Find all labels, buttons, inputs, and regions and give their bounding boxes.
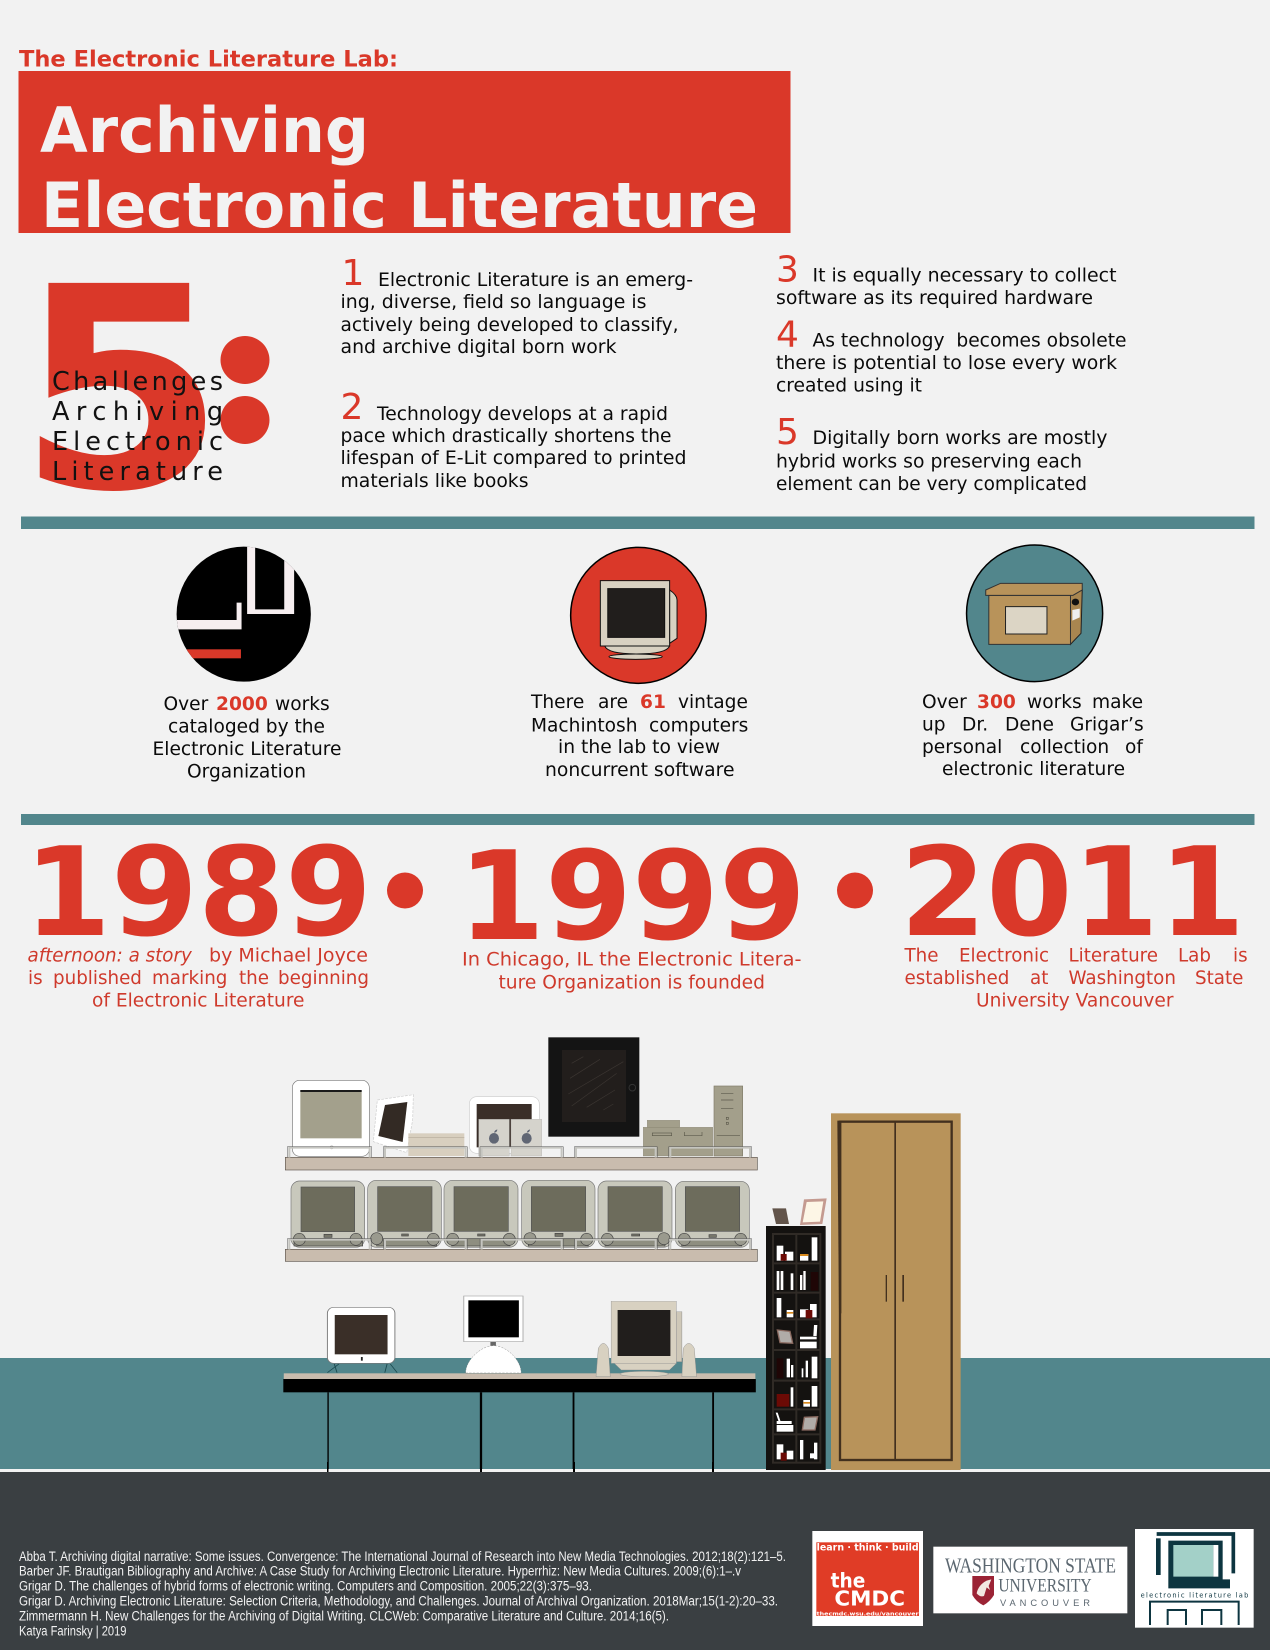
stat: 2000 works: Organization <box>187 762 306 783</box>
timeline: 2011: is <box>1233 946 1248 967</box>
stat: 61 computers <box>530 692 748 781</box>
timeline: 2011: Electronic <box>959 946 1049 967</box>
timeline: 1999: In Chicago, IL the Electronic Litera- <box>462 950 802 971</box>
challenge 1 <box>340 253 693 358</box>
logo: Electronic Literature Lab <box>1135 1529 1254 1628</box>
stat: 61 computers: There <box>530 692 584 713</box>
timeline: 2011: The <box>904 946 939 967</box>
stat: 2000 works: Electronic Literature <box>152 739 342 760</box>
stat: 300 works: Over <box>922 692 967 713</box>
challenge 2: 2 <box>340 387 363 428</box>
timeline: 1989: 1989 <box>24 822 372 965</box>
challenge 1: ing, diverse, field so language is <box>340 292 646 313</box>
stat: 61 computers: noncurrent software <box>545 760 734 781</box>
stat: 300 works: collection <box>1020 737 1109 758</box>
stat: 2000 works <box>152 694 342 783</box>
stat: 61 computers: computers <box>649 716 748 737</box>
logo: the CMDC <box>812 1531 923 1626</box>
heading: 5 challenges: Archiving <box>52 397 223 427</box>
challenge 5: hybrid works so preserving each <box>776 452 1082 473</box>
references: Zimmermann H. New Challenges for the Archiving of Digital Writing. CLCWeb: Comparative Literature and Culture. 2014;16(5). <box>19 1608 669 1624</box>
computer: iMac G4 <box>464 1296 523 1373</box>
logo: the CMDC: thecmdc.wsu.edu/vancouver <box>817 1611 919 1617</box>
timeline: 1999: 1999 <box>458 826 806 969</box>
wall band <box>0 1358 1270 1469</box>
challenge 3: software as its required hardware <box>776 288 1093 309</box>
challenge 4: created using it <box>776 376 922 397</box>
challenge 2: Technology develops at a rapid <box>376 404 668 425</box>
logo: the CMDC: learn · think · build <box>817 1543 919 1554</box>
challenge 4: 4 <box>776 315 799 356</box>
timeline: 1989: beginning <box>278 968 369 989</box>
stacked box <box>408 1133 464 1156</box>
heading: 5 challenges: Literature <box>52 457 223 487</box>
challenge 1: and archive digital born work <box>340 337 617 358</box>
row of six monitors <box>291 1180 749 1247</box>
stat: 61 computers: Machintosh <box>531 716 638 737</box>
heading: 5 challenges: 5 <box>16 228 226 554</box>
logo: Washington State University Vancouver <box>933 1547 1127 1613</box>
challenge 3 <box>776 250 1116 309</box>
timeline: 1989: is <box>28 968 43 989</box>
timeline: 1989: the <box>239 968 269 989</box>
stat: 2000 works: 2000 <box>216 694 268 715</box>
timeline: 1989: by Michael Joyce <box>209 946 368 967</box>
timeline dot <box>387 872 423 908</box>
challenge 2: materials like books <box>340 471 528 492</box>
stat: 300 works: Dr. <box>962 715 988 736</box>
challenge 5: 5 <box>776 412 799 453</box>
references: Grigar D. Archiving Electronic Literature: Selection Criteria, Methodology, and Challenges. Journal of Archival Organization. 2018Mar;15(1-2):20–33. <box>19 1594 778 1609</box>
desk with computers <box>283 1296 756 1472</box>
stat: 61 computers: in the lab to view <box>558 737 720 758</box>
logos <box>812 1529 1254 1628</box>
desk legs overlap <box>327 1462 714 1472</box>
title banner: Archiving <box>40 94 369 167</box>
challenge 2 <box>340 387 686 492</box>
timeline: 1989: published <box>53 968 142 989</box>
challenge 1: 1 <box>342 253 364 294</box>
heading: 5 challenges: Challenges <box>52 367 223 397</box>
challenge 3: It is equally necessary to collect <box>812 266 1116 287</box>
logo: Electronic Literature Lab: electronic literature lab <box>1141 1591 1248 1599</box>
timeline: 2011: at <box>1030 968 1048 989</box>
stat: 61 computers: are <box>598 692 628 713</box>
challenge 2: pace which drastically shortens the <box>340 426 672 447</box>
logo: Washington State University Vancouver: VANCOUVER <box>1000 1598 1090 1608</box>
stat: 61 computers: 61 <box>640 692 666 713</box>
stat: 300 works <box>922 692 1144 780</box>
references <box>19 1549 786 1639</box>
stat: 300 works: of <box>1125 737 1143 758</box>
timeline: 2011: State <box>1195 968 1243 989</box>
computer: small iMac <box>327 1307 397 1373</box>
challenge 3: 3 <box>776 250 799 291</box>
stat: 61 computers: vintage <box>678 692 748 713</box>
logo: Washington State University Vancouver: UNIVERSITY <box>998 1576 1092 1597</box>
wardrobe <box>831 1113 961 1470</box>
timeline: 2011: Literature <box>1068 946 1158 967</box>
icon: vintage computer <box>571 547 706 683</box>
logo: the CMDC: CMDC <box>834 1587 905 1611</box>
timeline: 2011: Washington <box>1068 968 1176 989</box>
shelf 1 <box>285 1147 757 1170</box>
logo: the CMDC: the <box>831 1568 865 1592</box>
icon: logo circle <box>169 543 311 682</box>
timeline dot <box>837 872 873 908</box>
references: Grigar D. The challenges of hybrid forms of electronic writing. Computers and Composition. 2005;22(3):375–93. <box>19 1579 592 1594</box>
stat: 2000 works: works <box>275 694 330 715</box>
computer: CRT monitor with speakers <box>596 1301 697 1377</box>
logo: Washington State University Vancouver: WASHINGTON STATE <box>945 1556 1116 1578</box>
challenge 1: actively being developed to classify, <box>340 315 678 336</box>
challenge 4: As technology becomes obsolete <box>812 331 1126 352</box>
timeline: 1989: of Electronic Literature <box>92 991 304 1012</box>
bookcase <box>766 1226 826 1470</box>
shelf 2 <box>285 1239 757 1261</box>
stat: 300 works: works <box>1027 692 1082 713</box>
computer: white iMac <box>292 1080 369 1156</box>
icon: archive box <box>967 545 1103 682</box>
references: Barber JF. Brautigan Bibliography and Archive: A Case Study for Archiving Electronic Literature. Hyperrhiz: New Media Cultures. 2009;(6):1–.v <box>19 1564 741 1579</box>
challenge 5: element can be very complicated <box>776 474 1087 495</box>
challenge 4: there is potential to lose every work <box>776 353 1117 374</box>
stat: 300 works: personal <box>922 737 1002 758</box>
references: Katya Farinsky | 2019 <box>19 1624 126 1639</box>
stat: 300 works: make <box>1092 692 1143 713</box>
stat: 300 works: up <box>922 715 946 736</box>
bookcase and wardrobe <box>766 1113 961 1470</box>
items on bookcase <box>772 1198 827 1225</box>
challenge 4 <box>776 315 1126 397</box>
upper shelves with computers <box>285 1037 757 1261</box>
heading: 5 challenges: Electronic <box>52 427 223 457</box>
references: Abba T. Archiving digital narrative: Some issues. Convergence: The International Journal of Research into New Media Technologies. 2012;18(2):121–5. <box>19 1549 786 1564</box>
timeline: 1989: afternoon: a story <box>28 946 193 967</box>
title banner: Electronic Literature <box>41 169 758 242</box>
tablet frame <box>373 1095 413 1153</box>
footer <box>0 1472 1270 1650</box>
timeline: 2011: Lab <box>1178 946 1211 967</box>
stat: 300 works: Dene <box>1005 715 1054 736</box>
stat: 300 works: 300 <box>977 692 1016 713</box>
challenge 1: Electronic Literature is an emerg- <box>378 270 693 291</box>
desk <box>283 1373 756 1472</box>
monitor with cube computers <box>469 1097 542 1156</box>
icons row <box>169 543 1103 683</box>
timeline: 2011: established <box>904 968 1009 989</box>
stat: 2000 works: Over <box>164 694 209 715</box>
subtitle: The Electronic Literature Lab: <box>19 46 398 72</box>
title banner <box>18 71 790 242</box>
desktop and tower <box>643 1086 743 1156</box>
stat: 300 works: Grigar’s <box>1070 715 1144 736</box>
challenge 5 <box>776 412 1108 495</box>
stat: 300 works: electronic literature <box>942 759 1125 780</box>
stat: 2000 works: cataloged by the <box>168 717 325 738</box>
challenge 5: Digitally born works are mostly <box>812 428 1108 449</box>
timeline: 2011: 2011 <box>900 822 1245 965</box>
timeline: 1999: ture Organization is founded <box>498 972 765 994</box>
timeline: 1989: marking <box>152 968 227 989</box>
timeline: 2011: University Vancouver <box>976 991 1174 1012</box>
challenge 2: lifespan of E-Lit compared to printed <box>340 448 686 469</box>
black monitor <box>548 1037 639 1137</box>
